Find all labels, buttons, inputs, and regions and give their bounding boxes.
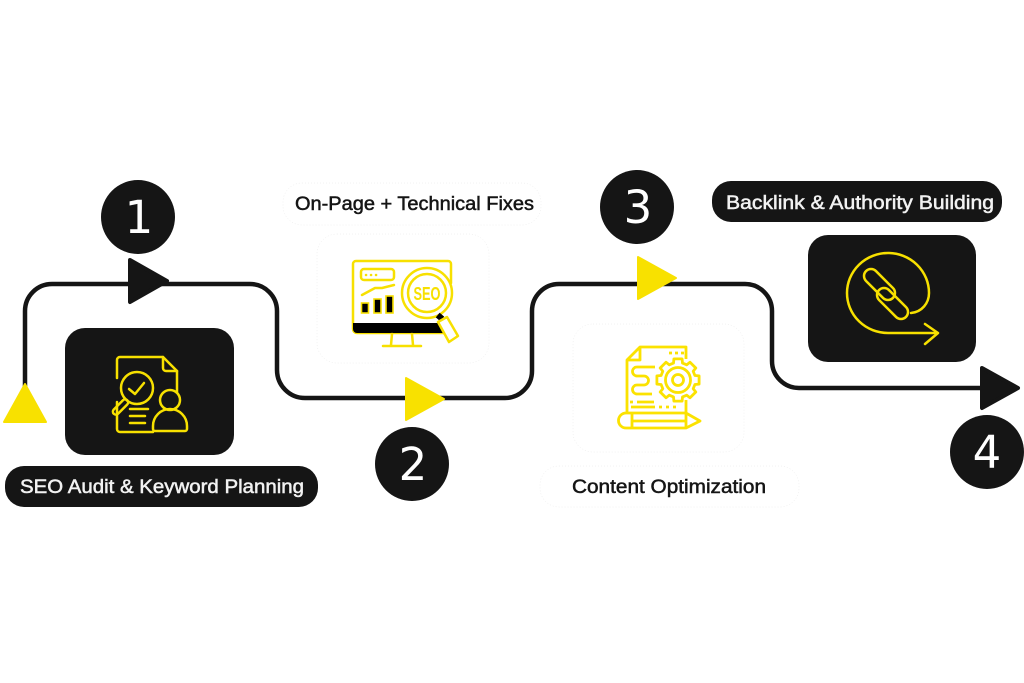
step number 4 [950, 415, 1024, 489]
step number 2: 2 [399, 438, 427, 491]
step number 3: 3 [624, 181, 652, 234]
arrow: start yellow triangle [4, 384, 46, 422]
step number 1: 1 [125, 191, 153, 244]
panel: backlink icon card [808, 235, 976, 362]
icon: document with magnifier and person [112, 357, 187, 432]
label: On-Page + Technical Fixes [283, 183, 541, 225]
label: SEO Audit & Keyword Planning: SEO Audit & Keyword Planning [20, 477, 304, 498]
icon: chain link with circular arrow [847, 253, 938, 344]
label: On-Page + Technical Fixes: On-Page + Technical Fixes [295, 194, 534, 215]
flow path line [25, 284, 985, 398]
step number 2 [375, 427, 449, 501]
panel: SEO audit icon card [65, 328, 234, 455]
icon: document with gear and pencil [619, 347, 700, 428]
step number 4: 4 [973, 426, 1001, 479]
panel: on-page SEO icon card [317, 234, 489, 363]
label: SEO Audit & Keyword Planning [5, 466, 318, 507]
arrow: black triangle step 1 [130, 260, 167, 302]
arrow: yellow triangle step 3 [638, 257, 676, 299]
label: Content Optimization: Content Optimization [572, 477, 766, 498]
label: Content Optimization [540, 466, 799, 507]
panel: content optimization icon card [573, 324, 744, 452]
arrow: black end triangle [982, 368, 1018, 408]
label: Backlink & Authority Building: Backlink & Authority Building [726, 193, 994, 214]
icon: monitor with SEO magnifier: SEO [414, 284, 440, 304]
step number 3 [600, 170, 674, 244]
label: Backlink & Authority Building [712, 181, 1002, 222]
step number 1 [101, 180, 175, 254]
arrow: yellow triangle step 2 [406, 378, 444, 420]
icon: monitor with SEO magnifier [353, 261, 458, 346]
